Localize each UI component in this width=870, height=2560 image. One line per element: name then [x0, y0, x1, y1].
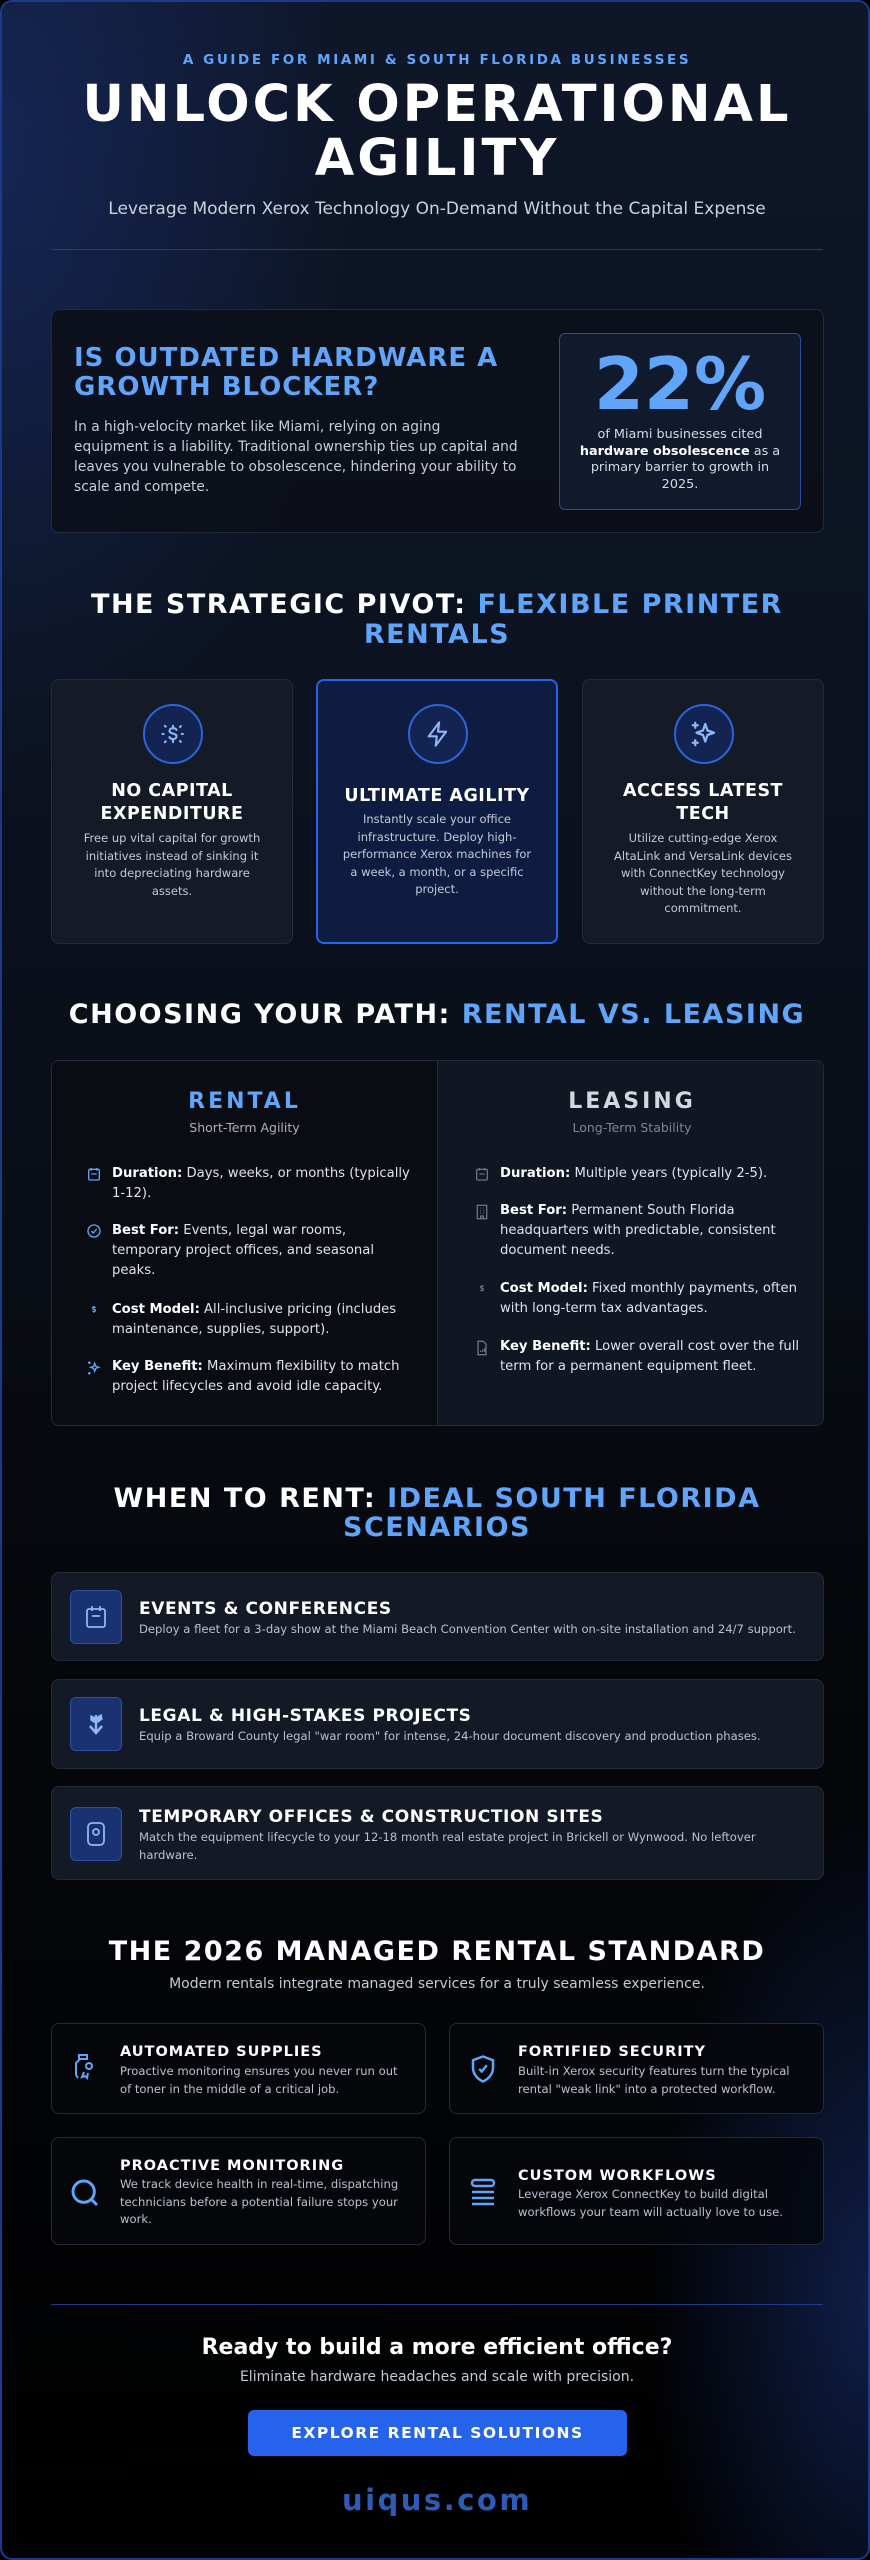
icon: stack — [470, 2178, 496, 2206]
panel: temporary offices — [51, 1786, 824, 1880]
panel: automated supplies: AUTOMATED SUPPLIES — [120, 2044, 323, 2060]
stat box: 22% — [559, 333, 801, 510]
heading: strategic pivot: THE STRATEGIC PIVOT: FLEXIBLE PRINTER RENTALS — [91, 589, 783, 650]
panel: access latest tech: ACCESS LATEST — [623, 781, 783, 801]
panel: ultimate agility: ULTIMATE AGILITY — [344, 786, 530, 806]
problem heading: GROWTH BLOCKER? — [74, 372, 379, 402]
panel: ultimate agility: Instantly scale your office infrastructure. Deploy high-performance Xerox machines for a week, a month, or a specific project. — [343, 812, 531, 896]
rental item: duration: Duration: Days, weeks, or months (typically 1-12). — [112, 1166, 410, 1201]
icon: dollar — [143, 704, 203, 764]
panel: custom workflows: Leverage Xerox ConnectKey to build digital workflows your team will actually love to use. — [518, 2187, 783, 2218]
icon: legal — [70, 1697, 122, 1751]
rental item: best for: Best For: Events, legal war rooms, temporary project offices, and seasonal peaks. — [112, 1223, 374, 1278]
rental heading: RENTAL — [188, 1089, 301, 1114]
subtitle: Leverage Modern Xerox Technology On-Demand Without the Capital Expense — [108, 199, 766, 219]
leasing item: duration: Duration: Multiple years (typically 2-5). — [500, 1166, 767, 1181]
panel: events & conferences — [51, 1572, 824, 1661]
panel: access latest tech: Utilize cutting-edge Xerox AltaLink and VersaLink devices with ConnectKey technology without the long-term commitment. — [614, 831, 792, 915]
panel: legal projects — [51, 1679, 824, 1769]
icon: shield — [472, 2055, 494, 2083]
icon: supplies — [75, 2054, 93, 2080]
CTA button: EXPLORE RENTAL SOLUTIONS — [291, 2424, 584, 2442]
panel: events & conferences: Deploy a fleet for a 3-day show at the Miami Beach Convention Center with on-site installation and 24/7 support. — [139, 1622, 796, 1636]
panel: legal projects: Equip a Broward County legal "war room" for intense, 24-hour document discovery and production phases. — [139, 1729, 761, 1743]
CTA button — [248, 2410, 627, 2456]
column: leasing: Long-Term Stability — [572, 1120, 692, 1135]
panel: temporary offices: Match the equipment lifecycle to your 12-18 month real estate project in Brickell or Wynwood. No leftover hardware. — [139, 1830, 756, 1862]
panel: comparison table — [51, 1060, 824, 1426]
panel: custom workflows: CUSTOM WORKFLOWS — [518, 2168, 717, 2184]
heading: managed rental standard: THE 2026 MANAGED RENTAL STANDARD — [109, 1936, 765, 1967]
panel: legal projects: LEGAL & HIGH-STAKES PROJECTS — [139, 1706, 472, 1726]
panel: custom workflows — [449, 2137, 824, 2245]
problem heading — [74, 343, 498, 402]
panel: proactive monitoring — [51, 2137, 426, 2245]
column: leasing — [437, 1061, 825, 1427]
panel: proactive monitoring: PROACTIVE MONITORING — [120, 2158, 344, 2174]
leasing item: best for: Best For: Permanent South Florida headquarters with predictable, consistent document needs. — [500, 1203, 776, 1258]
panel: no capital expenditure: Free up vital capital for growth initiatives instead of sinking it into depreciating hardware assets. — [84, 831, 260, 898]
stat box: 22%: of Miami businesses cited hardware obsolescence as a primary barrier to growth in 2025. — [580, 427, 780, 492]
problem text: In a high-velocity market like Miami, relying on aging equipment is a liability. Traditional ownership ties up capital and leaves you vulnerable to obsolescence, hindering your ability to scale and compete. — [74, 419, 518, 495]
panel: automated supplies: Proactive monitoring ensures you never run out of toner in the middle of a critical job. — [120, 2064, 398, 2096]
column: rental — [52, 1061, 437, 1427]
panel: no capital expenditure: NO CAPITAL — [111, 781, 233, 801]
icon: calendar — [70, 1590, 122, 1644]
panel: fortified security: FORTIFIED SECURITY — [518, 2044, 706, 2060]
leasing item: cost model: Cost Model: Fixed monthly payments, often with long-term tax advantages. — [500, 1281, 797, 1316]
heading: when to rent: WHEN TO RENT: IDEAL SOUTH FLORIDA SCENARIOS — [114, 1483, 760, 1543]
panel: problem — [51, 309, 824, 533]
title: AGILITY — [315, 129, 559, 188]
panel: temporary offices: TEMPORARY OFFICES & CONSTRUCTION SITES — [139, 1807, 603, 1827]
panel: proactive monitoring: We track device health in real-time, dispatching technicians before a potential failure stops your work. — [120, 2177, 398, 2226]
panel: events & conferences: EVENTS & CONFERENCES — [139, 1599, 392, 1619]
rental item: cost model: Cost Model: All-inclusive pricing (includes maintenance, supplies, support). — [112, 1302, 396, 1337]
panel: no capital expenditure: EXPENDITURE — [100, 804, 244, 824]
heading: rental vs leasing: CHOOSING YOUR PATH: RENTAL VS. LEASING — [69, 999, 805, 1030]
column: rental: Short-Term Agility — [189, 1120, 300, 1135]
rental item: key benefit: Key Benefit: Maximum flexibility to match project lifecycles and avoid idle capacity. — [112, 1359, 400, 1394]
icon: sparkles — [674, 704, 734, 764]
title — [83, 75, 791, 188]
panel: access latest tech — [582, 679, 824, 944]
icon: lightning — [408, 704, 468, 764]
stat box: 22%: 22% — [594, 342, 766, 426]
leasing item: key benefit: Key Benefit: Lower overall cost over the full term for a permanent equipment fleet. — [500, 1339, 799, 1374]
panel: fortified security: Built-in Xerox security features turn the typical rental "weak link" into a protected workflow. — [518, 2064, 790, 2096]
CTA subtext: Eliminate hardware headaches and scale with precision. — [240, 2369, 634, 2385]
problem heading: IS OUTDATED HARDWARE A — [74, 343, 498, 373]
eyebrow label: A GUIDE FOR MIAMI & SOUTH FLORIDA BUSINESSES — [183, 52, 691, 68]
panel: access latest tech: TECH — [676, 804, 730, 824]
managed subtitle: Modern rentals integrate managed services for a truly seamless experience. — [169, 1976, 705, 1992]
icon: device — [70, 1807, 122, 1861]
CTA heading: Ready to build a more efficient office? — [202, 2335, 672, 2360]
leasing heading: LEASING — [568, 1089, 696, 1114]
panel: ultimate agility — [316, 679, 558, 944]
title: UNLOCK OPERATIONAL — [83, 75, 791, 134]
panel: no capital expenditure — [51, 679, 293, 944]
icon: magnifier — [72, 2180, 98, 2206]
panel: automated supplies — [51, 2023, 426, 2114]
footer brand: uiqus.com — [342, 2483, 532, 2517]
panel: fortified security — [449, 2023, 824, 2114]
